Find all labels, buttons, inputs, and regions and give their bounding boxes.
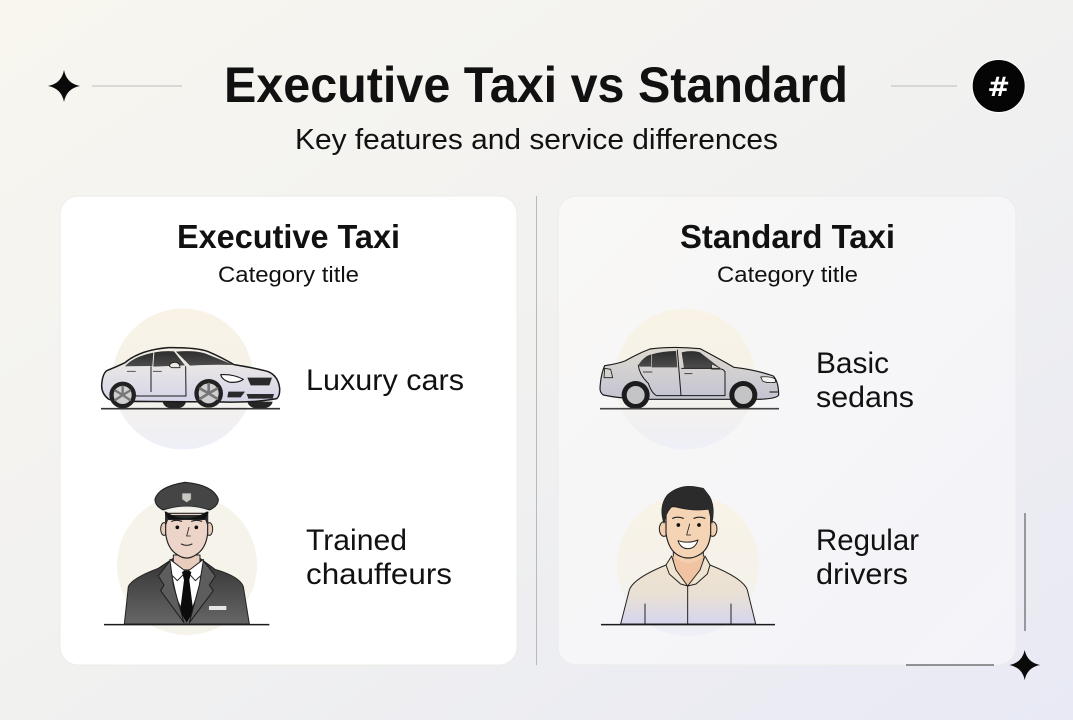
label: trained chauffeurs: chauffeurs [306, 558, 452, 591]
label: regular drivers: drivers [816, 558, 908, 591]
label: regular drivers: Regular [816, 524, 919, 557]
label: basic sedans [816, 347, 914, 414]
icon: basic sedan [600, 308, 779, 450]
heading: standard taxi: Standard Taxi [680, 218, 895, 255]
subtitle: Key features and service differences [295, 124, 778, 156]
divider [536, 196, 537, 665]
heading: executive taxi: Executive Taxi [177, 218, 400, 255]
label: basic sedans: sedans [816, 381, 914, 414]
label: regular drivers [816, 524, 919, 591]
label: trained chauffeurs [306, 524, 452, 591]
panel: standard taxi [558, 196, 1016, 665]
icon: luxury car [101, 308, 280, 450]
panel: executive taxi [60, 196, 517, 665]
title: Executive Taxi vs Standard [224, 57, 848, 113]
icon: chauffeur [104, 482, 269, 635]
category label: Category title [717, 262, 858, 287]
category label: Category title [218, 262, 359, 287]
header line left [92, 86, 182, 87]
badge: hash: # [987, 72, 1010, 103]
label: basic sedans: Basic [816, 347, 889, 380]
badge: hash [972, 60, 1025, 112]
label: trained chauffeurs: Trained [306, 524, 407, 557]
corner line vertical [1024, 513, 1026, 631]
label: luxury cars: Luxury cars [306, 364, 464, 397]
corner line horizontal [906, 664, 994, 666]
icon: regular driver [601, 486, 775, 636]
header line right [891, 86, 957, 87]
icon: sparkle bottom right [1010, 650, 1040, 680]
icon: sparkle top left [48, 70, 80, 102]
